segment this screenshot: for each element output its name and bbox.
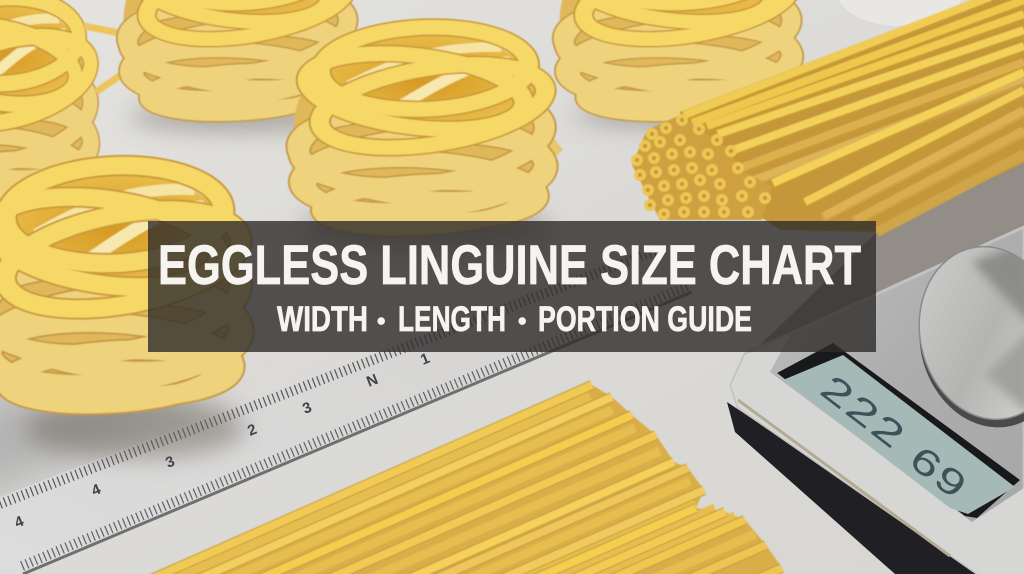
display bezel xyxy=(777,343,1020,518)
ceramic bowl edge xyxy=(836,0,964,26)
scale display: 222 xyxy=(810,367,912,460)
light front frame xyxy=(731,335,1024,574)
pasta nest: centre xyxy=(291,23,563,232)
subtitle xyxy=(277,300,752,339)
shadow band above scale xyxy=(760,150,1024,345)
nest shadows xyxy=(0,102,775,458)
scale base xyxy=(727,402,985,574)
pasta nest: lower left xyxy=(0,161,251,410)
digital kitchen scale xyxy=(727,227,1024,574)
pasta nest: top right xyxy=(557,0,801,118)
ruler numbers: 2 xyxy=(245,421,259,440)
steel weighing plate xyxy=(918,246,1024,428)
subtitle: • xyxy=(377,308,385,335)
ruler xyxy=(0,240,692,574)
straight linguine bundle: bottom xyxy=(149,385,782,574)
pasta nest: top centre-left xyxy=(84,0,357,118)
bundle cut ends xyxy=(632,115,772,220)
bundle strands xyxy=(682,0,1024,204)
title banner xyxy=(148,221,876,352)
subtitle: WIDTH xyxy=(277,300,368,339)
ruler numbers: 3 xyxy=(300,399,314,418)
scale display xyxy=(783,355,1015,514)
scale display: 69 xyxy=(899,438,974,510)
ruler numbers: 4 xyxy=(12,513,27,532)
scale steel body xyxy=(731,227,1024,574)
ruler numbers xyxy=(12,350,432,532)
ruler numbers: 1 xyxy=(418,350,432,369)
subtitle: PORTION GUIDE xyxy=(538,300,752,339)
pasta nest: top left xyxy=(0,0,98,212)
ruler numbers: 3 xyxy=(163,453,177,472)
front edge highlight xyxy=(738,400,950,556)
ruler numbers: N xyxy=(364,371,381,391)
straight linguine bundle: top right xyxy=(632,0,1024,232)
grey table shading lower left xyxy=(0,390,240,510)
ruler numbers: 4 xyxy=(89,481,104,500)
subtitle: • xyxy=(518,308,526,335)
subtitle: LENGTH xyxy=(398,300,506,339)
